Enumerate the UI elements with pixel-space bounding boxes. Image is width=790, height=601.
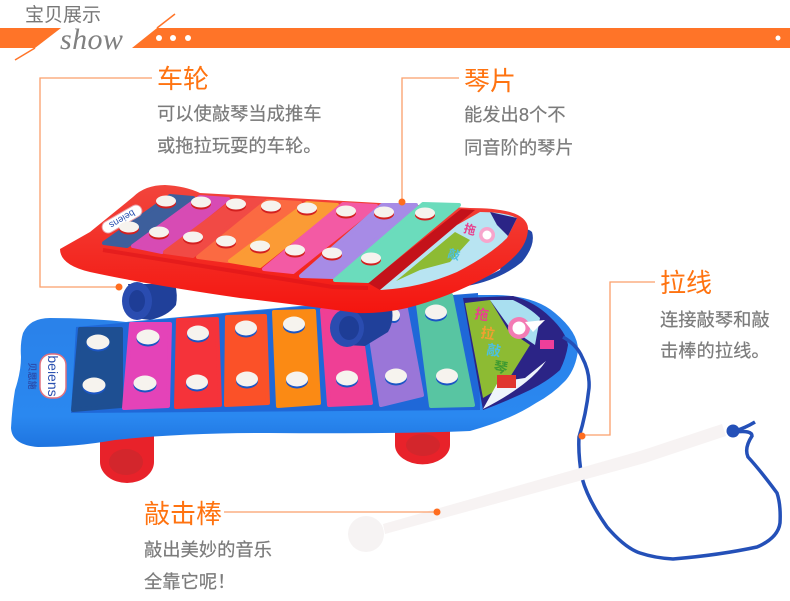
callout: wheels: 或拖拉玩耍的车轮。 bbox=[157, 135, 322, 156]
callout: keys: 能发出8个不 bbox=[464, 104, 566, 125]
blue wheels bbox=[122, 282, 392, 347]
script word: show: show bbox=[60, 23, 123, 56]
callout: wheels: 车轮 bbox=[157, 64, 209, 94]
sticker bbox=[380, 212, 517, 290]
blue xylophone bbox=[11, 293, 578, 483]
callout: string: 拉线 bbox=[660, 268, 712, 298]
sticker: 敲 bbox=[485, 341, 502, 359]
sticker: 拉 bbox=[479, 324, 496, 342]
callout: keys bbox=[398, 66, 574, 206]
logo: beiens: 贝恩施 bbox=[27, 362, 38, 390]
inset behind bars bbox=[71, 293, 480, 413]
sticker: 拖 bbox=[462, 220, 478, 238]
callout: mallet: 敲击棒 bbox=[144, 499, 222, 529]
callout: string bbox=[578, 268, 770, 440]
rope bbox=[563, 337, 780, 559]
callout: string: 连接敲琴和敲 bbox=[660, 309, 770, 330]
bars bbox=[73, 295, 473, 410]
under-bar shade bbox=[103, 250, 368, 288]
blue board bbox=[11, 295, 578, 447]
logo: beiens bbox=[27, 354, 66, 398]
bars bbox=[104, 196, 459, 281]
red rollers bbox=[100, 428, 450, 483]
logo: beiens: beiens bbox=[45, 355, 61, 397]
red xylophone bbox=[60, 185, 533, 347]
sticker bbox=[463, 296, 568, 410]
callout: mallet: 敲出美妙的音乐 bbox=[144, 539, 272, 560]
pins bbox=[119, 196, 435, 264]
callout: keys: 同音阶的琴片 bbox=[464, 137, 574, 158]
sticker: 敲 bbox=[446, 245, 462, 263]
logo: beiens: beiens bbox=[107, 207, 137, 230]
callout: keys: 琴片 bbox=[464, 66, 516, 96]
logo: beiens bbox=[100, 203, 144, 235]
pins bbox=[82, 304, 458, 392]
callout: wheels: 可以使敲琴当成推车 bbox=[157, 103, 322, 124]
sticker: 拖 bbox=[473, 305, 490, 323]
blue backing edge bbox=[467, 229, 533, 286]
sticker: 琴 bbox=[492, 358, 509, 376]
heading: product display: 宝贝展示 bbox=[25, 4, 101, 26]
red board bbox=[60, 185, 528, 313]
callout: string: 击棒的拉线。 bbox=[660, 340, 770, 361]
mallet bbox=[348, 424, 740, 552]
header banner bbox=[0, 4, 790, 60]
callout: wheels bbox=[40, 64, 322, 290]
callout: mallet: 全靠它呢！ bbox=[144, 571, 235, 592]
callout: mallet bbox=[144, 499, 440, 592]
